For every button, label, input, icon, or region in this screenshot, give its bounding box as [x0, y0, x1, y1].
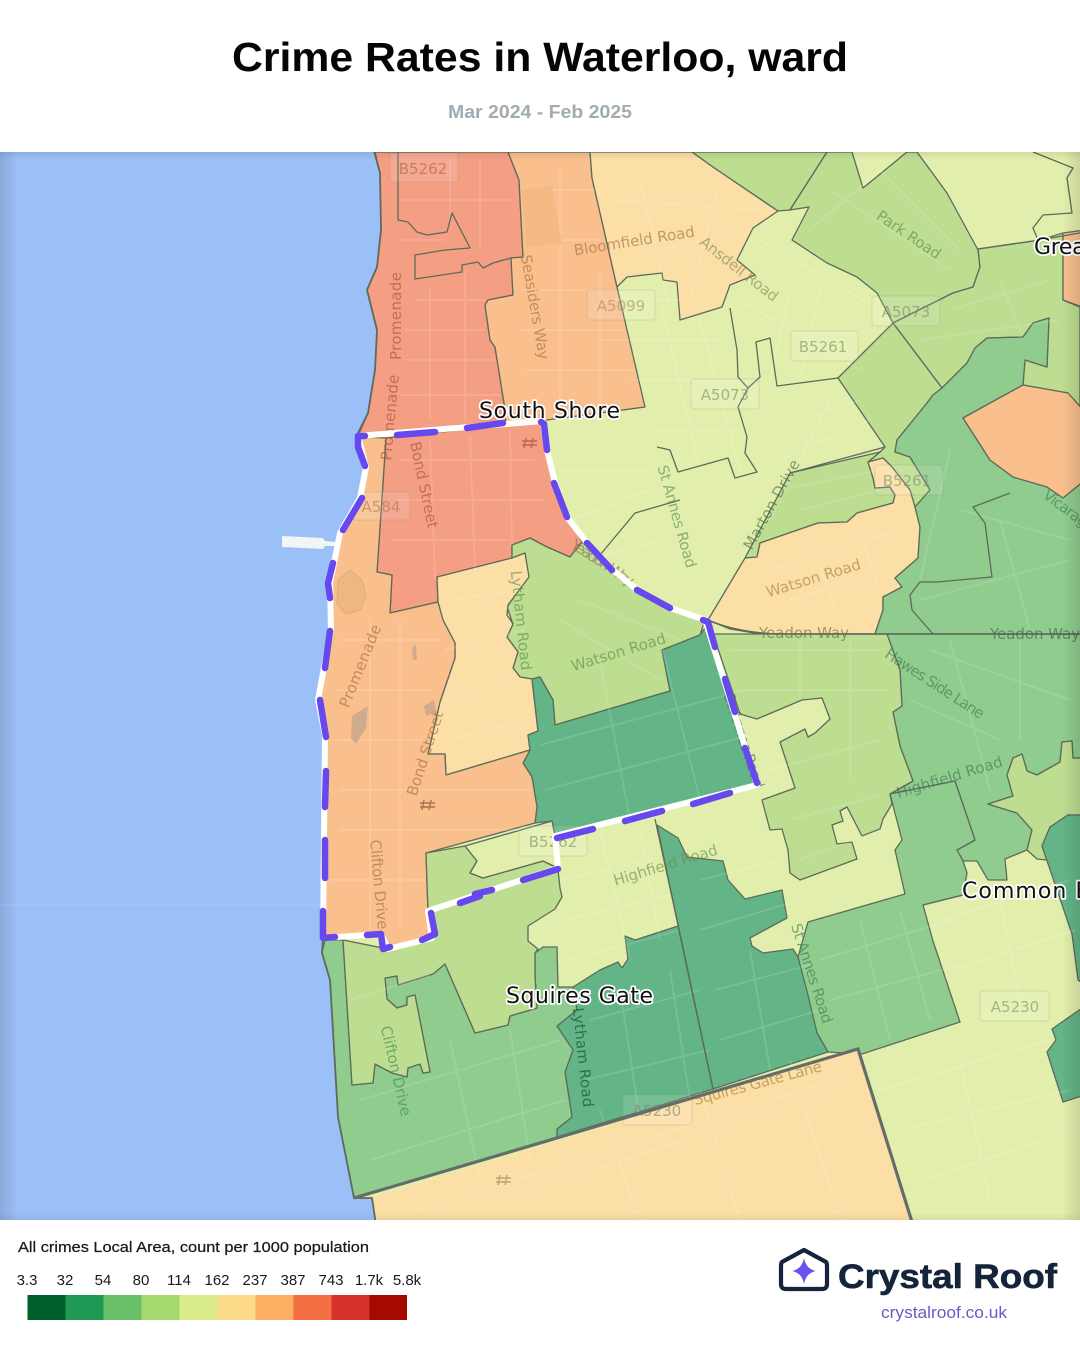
legend title: All crimes Local Area, count per 1000 population [18, 1239, 369, 1256]
label group: ward and south: St Annes Road [720, 690, 768, 791]
pier [282, 536, 336, 549]
region: south-east edge dark green [1047, 1006, 1080, 1102]
label group: north: St Annes Road [654, 463, 700, 570]
region: Park Road light green area [790, 152, 980, 323]
legend scale values: 1.7k [355, 1272, 384, 1289]
place labels: Squires Gate [506, 984, 653, 1009]
region: eastern medium green area [875, 318, 1080, 634]
label group: north: Ansdell Road [696, 233, 782, 305]
website: crystalroof.co.uk [881, 1304, 1008, 1322]
legend scale values: 162 [204, 1272, 230, 1289]
label group: north [353, 153, 1080, 675]
label group: ward and south: A5230 [991, 998, 1039, 1016]
label group: north: Watson Road [569, 629, 668, 675]
icon: house with star [781, 1250, 827, 1289]
label group: north: B5261 [883, 472, 931, 490]
rail station icons [420, 438, 537, 1185]
region: east-edge dark green [1042, 815, 1080, 985]
region: north orange area [485, 152, 645, 424]
map: crime rate choropleth [0, 147, 1080, 1225]
label group: north: Park Road [873, 207, 945, 263]
promenade grey patches [351, 644, 436, 744]
road: Yeadon Way line [708, 620, 1080, 634]
legend scale values: 3.3 [17, 1272, 37, 1289]
region: south-of-Yeadon medium green [887, 634, 1080, 880]
region: east light green area [893, 233, 1080, 410]
subtitle: date range: Mar 2024 - Feb 2025 [448, 101, 632, 122]
place labels: South Shore [479, 399, 620, 424]
label group: north: Lytham Road [507, 570, 535, 671]
label group: ward and south: Highfield Road [894, 753, 1005, 802]
logo: Crystal Roof [781, 1250, 1058, 1322]
region: south-west medium green area [322, 940, 577, 1198]
region: Marton Drive light green strip [745, 452, 895, 558]
label group: ward and south: Clifton Drive [366, 839, 392, 930]
label group: ward and south: Highfield Road [611, 841, 720, 890]
region: east-edge orange area [1063, 230, 1080, 308]
region: south medium green area [798, 781, 975, 1054]
road labels [336, 153, 1080, 1125]
car park patch [522, 186, 562, 246]
label group: ward and south: Promenade [336, 622, 385, 710]
label group: north: Yeadon Way [989, 625, 1080, 643]
label group: north: Seasiders Way [517, 253, 553, 361]
region: east lime area [988, 741, 1080, 860]
region: Lytham Road cream area [428, 553, 538, 775]
region: ward south pale green [465, 821, 558, 878]
label group: north: A5099 [597, 297, 645, 315]
label group: ward and south: A5230 [633, 1102, 681, 1120]
legend scale values: 54 [95, 1272, 111, 1289]
boundary outlines within regions [398, 152, 1080, 1089]
street network overlay [330, 160, 1080, 1220]
region: Lytham Road dark green area [557, 926, 713, 1137]
legend scale values: 743 [318, 1272, 344, 1289]
label group: ward and south: Clifton Drive [377, 1024, 415, 1118]
label group: north: A5073 [701, 386, 749, 404]
region: central red area [377, 421, 582, 613]
region: top light green area [692, 152, 827, 211]
label group: north: Yeadon Way [758, 624, 849, 642]
region: Waterloo ward dark green block [523, 628, 757, 836]
legend scale values: 114 [167, 1272, 191, 1289]
label group: ward and south: Hawes Side Lane [882, 645, 988, 723]
region: south cream area [372, 1049, 912, 1222]
label group: ward and south [336, 486, 1080, 1125]
title: Crime Rates in Waterloo, ward [232, 34, 848, 80]
brand name: Crystal Roof [838, 1258, 1058, 1296]
label group: north: Marton Drive [740, 456, 804, 553]
label group: north: Yeadon Way [567, 535, 638, 590]
legend scale values: 5.8k [393, 1272, 422, 1289]
sea [0, 147, 381, 1225]
legend scale values: 387 [280, 1272, 306, 1289]
region: north-east cream area [590, 152, 778, 320]
label group: ward and south: B5262 [529, 833, 577, 851]
label group: ward and south: Squires Gate Lane [692, 1057, 824, 1109]
legend colour ramp [28, 1295, 407, 1320]
label group: north: Watson Road [764, 555, 863, 601]
label group: north: Promenade [377, 374, 403, 461]
map edge shading [0, 152, 1080, 1220]
region: north red area [358, 152, 523, 436]
label group: north: B5261 [799, 338, 847, 356]
label group: north: B5262 [399, 160, 447, 178]
region: Watson Road west light green [507, 538, 705, 725]
label group: north: A584 [362, 498, 400, 516]
region: central light green south of Yeadon [713, 634, 913, 880]
legend [17, 1239, 422, 1320]
label group: ward and south: St Annes Road [787, 921, 836, 1026]
thick boundary: south cream area [354, 1049, 912, 1222]
region: south dark green area [657, 825, 828, 1089]
label group: north: Bloomfield Road [573, 223, 696, 259]
region: south-west light green area [343, 870, 562, 1085]
legend scale values: 237 [242, 1272, 268, 1289]
legend scale values [17, 1272, 422, 1289]
legend scale values: 32 [57, 1272, 73, 1289]
legend scale values: 80 [133, 1272, 149, 1289]
label group: north: Promenade [387, 272, 405, 360]
label group: north: Bond Street [406, 440, 442, 530]
label group: ward and south: Lytham Road [569, 1007, 597, 1108]
Waterloo ward outline [318, 421, 757, 949]
region: ward south light green [426, 846, 558, 911]
label group: ward and south: Bond Street [403, 709, 447, 798]
region: Watson Road east cream area [708, 458, 920, 634]
label group: north: A5073 [882, 303, 930, 321]
region: eastern orange blob [963, 385, 1080, 498]
place labels [479, 235, 1080, 1009]
park patch [337, 570, 366, 614]
region: central east light green block [838, 323, 942, 507]
region: ward-west orange area [318, 437, 537, 949]
